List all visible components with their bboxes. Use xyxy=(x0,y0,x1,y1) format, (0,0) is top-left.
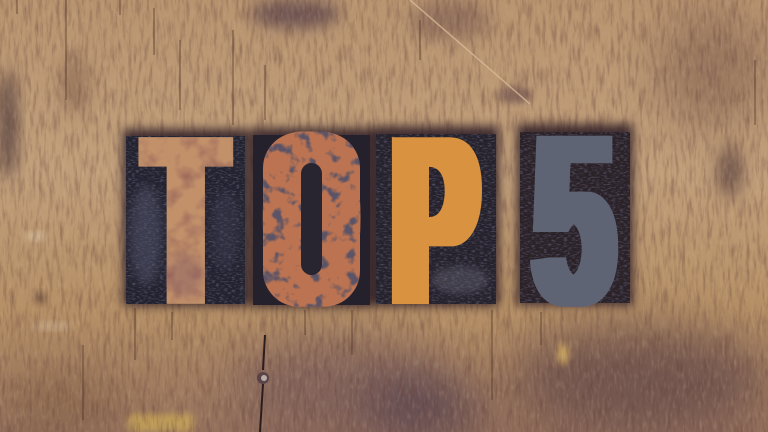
counter of O xyxy=(301,163,322,275)
letter block: T xyxy=(126,88,245,354)
letter O: O xyxy=(269,83,354,354)
letter P: P xyxy=(393,89,477,354)
letter block: O xyxy=(253,83,370,354)
block shadows xyxy=(123,124,633,307)
letter block: P xyxy=(376,89,496,354)
letter block: 5 xyxy=(520,86,630,355)
letter T: T xyxy=(147,88,225,354)
numeral 5: 5 xyxy=(534,86,614,355)
